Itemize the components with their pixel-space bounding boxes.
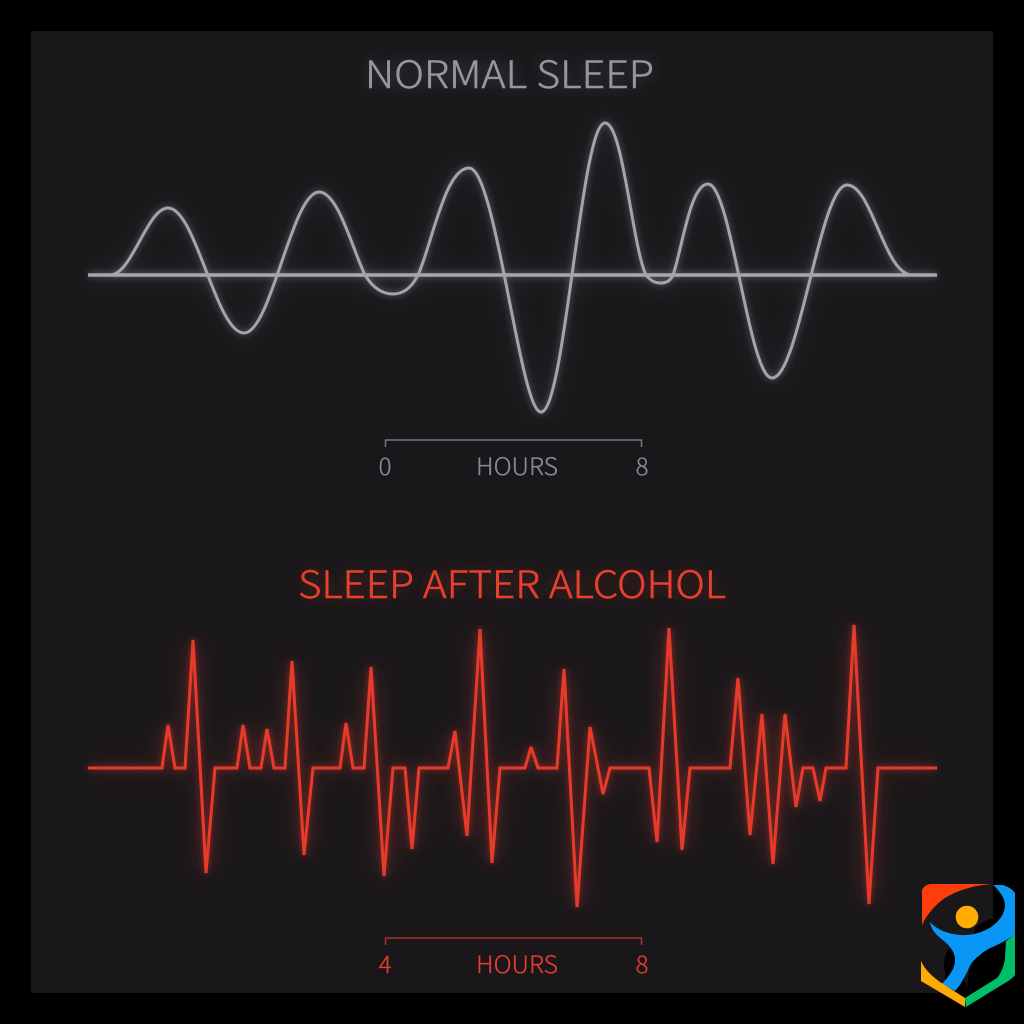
- time scale: 4 to 8 hours: 8: [636, 945, 648, 980]
- title: sleep after alcohol: SLEEP AFTER ALCOHOL: [298, 554, 726, 609]
- time scale: 0 to 8 hours: [379, 440, 648, 482]
- chart: normal sleep wave: [88, 123, 937, 412]
- title: normal sleep: NORMAL SLEEP: [365, 44, 654, 99]
- time scale: 4 to 8 hours: 4: [379, 945, 392, 980]
- time scale: 0 to 8 hours: 8: [636, 447, 648, 482]
- time scale: 0 to 8 hours: 0: [379, 447, 391, 482]
- time scale: 4 to 8 hours: HOURS: [476, 945, 558, 980]
- time scale: 4 to 8 hours: [379, 938, 648, 980]
- time scale: 0 to 8 hours: HOURS: [476, 447, 558, 482]
- icon: shield logo: [921, 884, 1015, 1007]
- chart: disrupted sleep wave: [88, 625, 937, 907]
- panel: normal sleep: [88, 44, 937, 482]
- panel: sleep after alcohol: [88, 554, 937, 980]
